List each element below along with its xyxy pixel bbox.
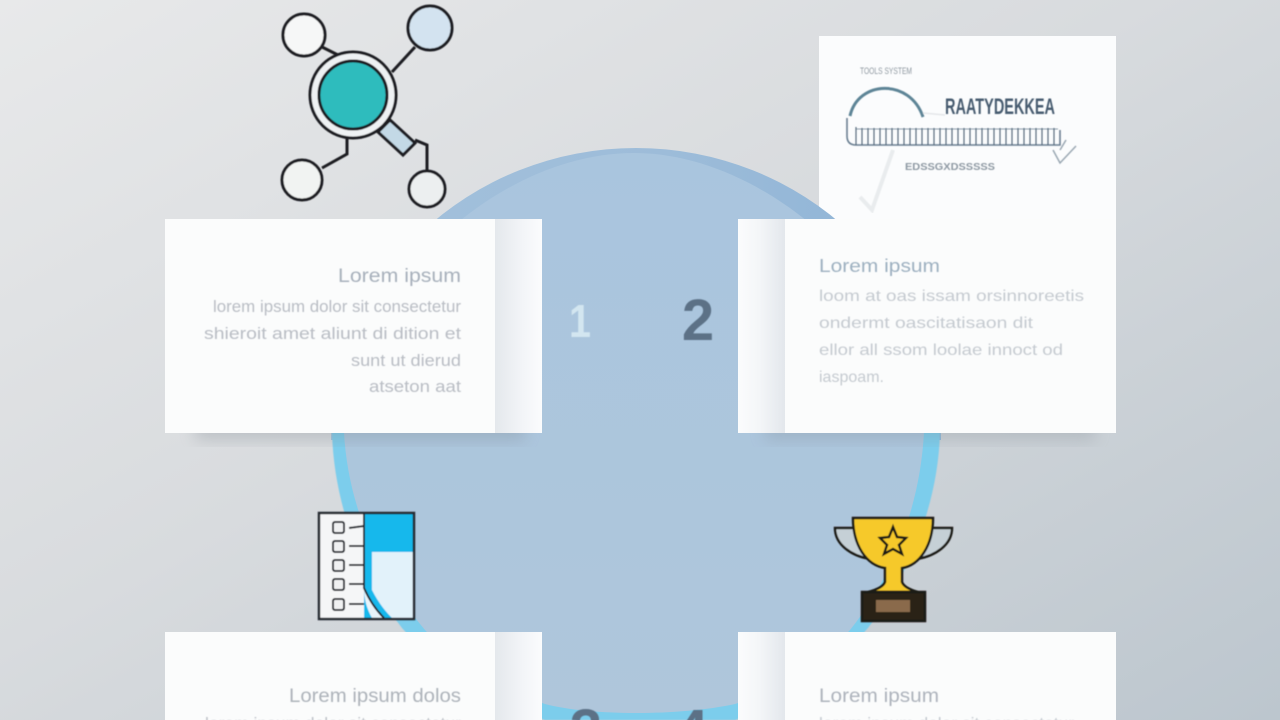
card 4 body (785, 632, 1116, 720)
card 1 text: sunt ut dierud (351, 351, 461, 370)
card 1 fold (495, 219, 542, 433)
card 3 heading: Lorem ipsum dolos (289, 686, 461, 707)
card 2 shadow (765, 418, 1095, 440)
icon: checklist document (319, 513, 414, 619)
panel: chart image card (819, 36, 1116, 219)
number 1: 1 (569, 295, 591, 347)
card 2 text: ondermt oascitatisaon dit (819, 315, 1034, 332)
card 2 text: loom at oas issam orsinnoreetis (819, 288, 1084, 305)
card 3 body (165, 632, 495, 720)
card 1 text: atseton aat (369, 377, 461, 396)
card 1 body (165, 219, 495, 433)
card 1 heading: Lorem ipsum (338, 266, 461, 287)
panel: card 4 (738, 632, 1116, 720)
icon: faint check mark (860, 150, 893, 210)
card 2 body (785, 219, 1116, 433)
card 2 heading: Lorem ipsum (819, 256, 940, 276)
card 2 fold (738, 219, 785, 433)
chart title: RAATYDEKKEA (945, 94, 1055, 119)
card 1 text: shieroit amet aliunt di dition et (204, 324, 461, 343)
card 2 text: ellor all ssom loolae innoct od (819, 342, 1063, 359)
card 1 text: lorem ipsum dolor sit consectetur (213, 297, 461, 316)
panel: card 3 (165, 632, 542, 720)
card 4 heading: Lorem ipsum (819, 686, 939, 707)
card 4 fold (738, 632, 785, 720)
card 1 shadow (195, 418, 525, 440)
icon: magnifier network (282, 6, 452, 207)
card 3 fold (495, 632, 542, 720)
chart sublabel: EDSSGXDSSSSS (905, 162, 995, 173)
number 2: 2 (682, 288, 714, 353)
chart arc and ruler (847, 88, 1076, 163)
panel: card 2 (738, 219, 1116, 440)
card 1 text (204, 297, 461, 396)
icon: trophy (835, 518, 952, 621)
central disc with cyan rim (331, 148, 941, 720)
chart caption: TOOLS SYSTEM (860, 66, 912, 76)
card 2 text: iaspoam. (819, 369, 884, 386)
card 2 text (819, 288, 1084, 386)
panel: card 1 (165, 219, 542, 440)
